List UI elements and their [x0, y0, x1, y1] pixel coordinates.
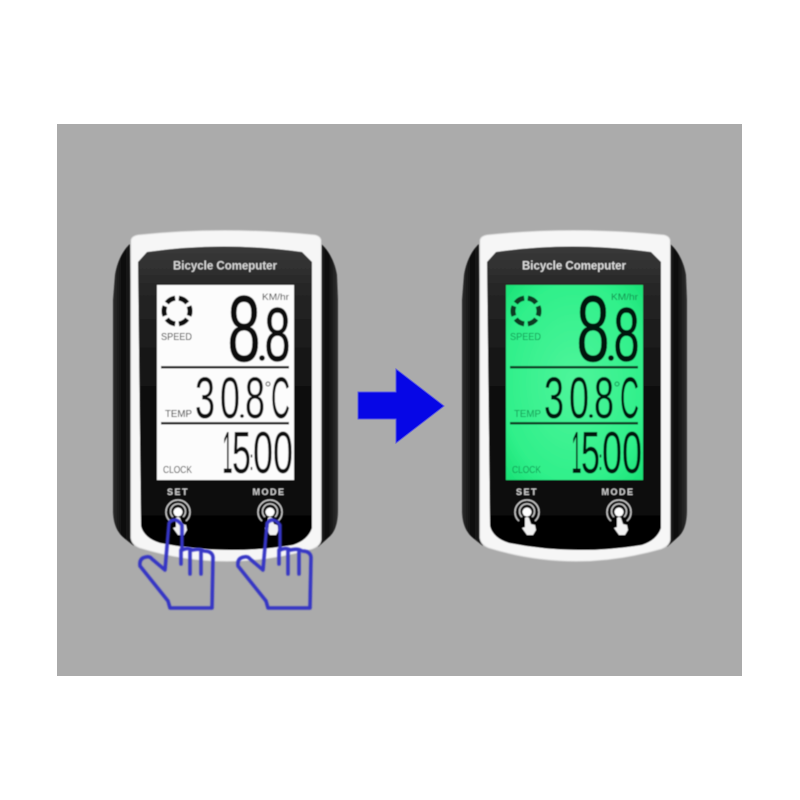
set touch button [166, 500, 190, 535]
white bezel [131, 230, 321, 561]
speed reading: 8 [264, 293, 290, 378]
title: Bicycle Comeputer [173, 258, 277, 272]
mode label: MODE [252, 487, 286, 497]
speed label: SPEED [510, 332, 541, 343]
set label: SET [516, 487, 538, 497]
temperature reading: 3 [195, 366, 215, 431]
right grip [318, 243, 338, 547]
hand outlines pressing buttons [140, 520, 311, 608]
temperature reading: 0 [220, 366, 240, 431]
background panel [57, 124, 742, 676]
clock label: CLOCK [163, 465, 192, 476]
clock reading: 0 [602, 420, 622, 486]
device: normal display [113, 230, 338, 561]
speed reading: 8 [614, 293, 640, 378]
speed wheel icon [513, 298, 539, 324]
device: backlit display: C [620, 366, 639, 431]
divider [161, 366, 289, 368]
mode touch button [258, 500, 282, 535]
divider [161, 422, 289, 424]
clock reading [222, 420, 293, 486]
set touch button [515, 500, 539, 535]
set label: SET [167, 487, 189, 497]
left grip [113, 244, 134, 546]
left hand [140, 520, 213, 608]
right hand [238, 520, 311, 608]
clock reading: 5 [581, 420, 600, 486]
temperature reading [544, 366, 639, 431]
speed label: SPEED [161, 332, 192, 343]
arrow [358, 369, 444, 443]
mode label: MODE [602, 487, 634, 497]
left grip [462, 244, 483, 546]
speed unit: KM/hr [262, 292, 289, 302]
black face [138, 246, 312, 550]
speed unit: KM/hr [611, 292, 638, 302]
LCD screen [157, 285, 294, 480]
speed wheel icon [164, 298, 190, 324]
speed reading: 8 [228, 276, 260, 381]
clock reading [572, 420, 642, 486]
temperature reading: 8 [245, 366, 265, 431]
temperature reading [195, 366, 290, 431]
clock reading: : [598, 444, 602, 477]
device: backlit display [462, 230, 687, 561]
temperature label: TEMP [514, 409, 541, 420]
temperature reading: 0 [569, 366, 589, 431]
divider [510, 422, 638, 424]
clock reading: 5 [232, 420, 251, 486]
clock reading: 0 [622, 420, 642, 486]
clock reading: 1 [572, 420, 582, 486]
temperature label: TEMP [165, 409, 192, 420]
mode touch button [607, 500, 631, 535]
LCD screen lit green [506, 285, 643, 480]
clock reading: 0 [253, 420, 273, 486]
divider [510, 366, 638, 368]
temperature reading: 3 [544, 366, 564, 431]
clock reading: 1 [222, 420, 232, 486]
device: normal display: C [271, 366, 290, 431]
right grip [667, 243, 687, 547]
clock reading: : [250, 444, 254, 477]
clock reading: 0 [273, 420, 293, 486]
black face [487, 246, 661, 550]
title: Bicycle Comeputer [522, 258, 626, 272]
temperature reading: 8 [594, 366, 614, 431]
white bezel [480, 230, 670, 561]
clock label: CLOCK [512, 465, 541, 476]
speed reading: 8 [576, 276, 610, 381]
